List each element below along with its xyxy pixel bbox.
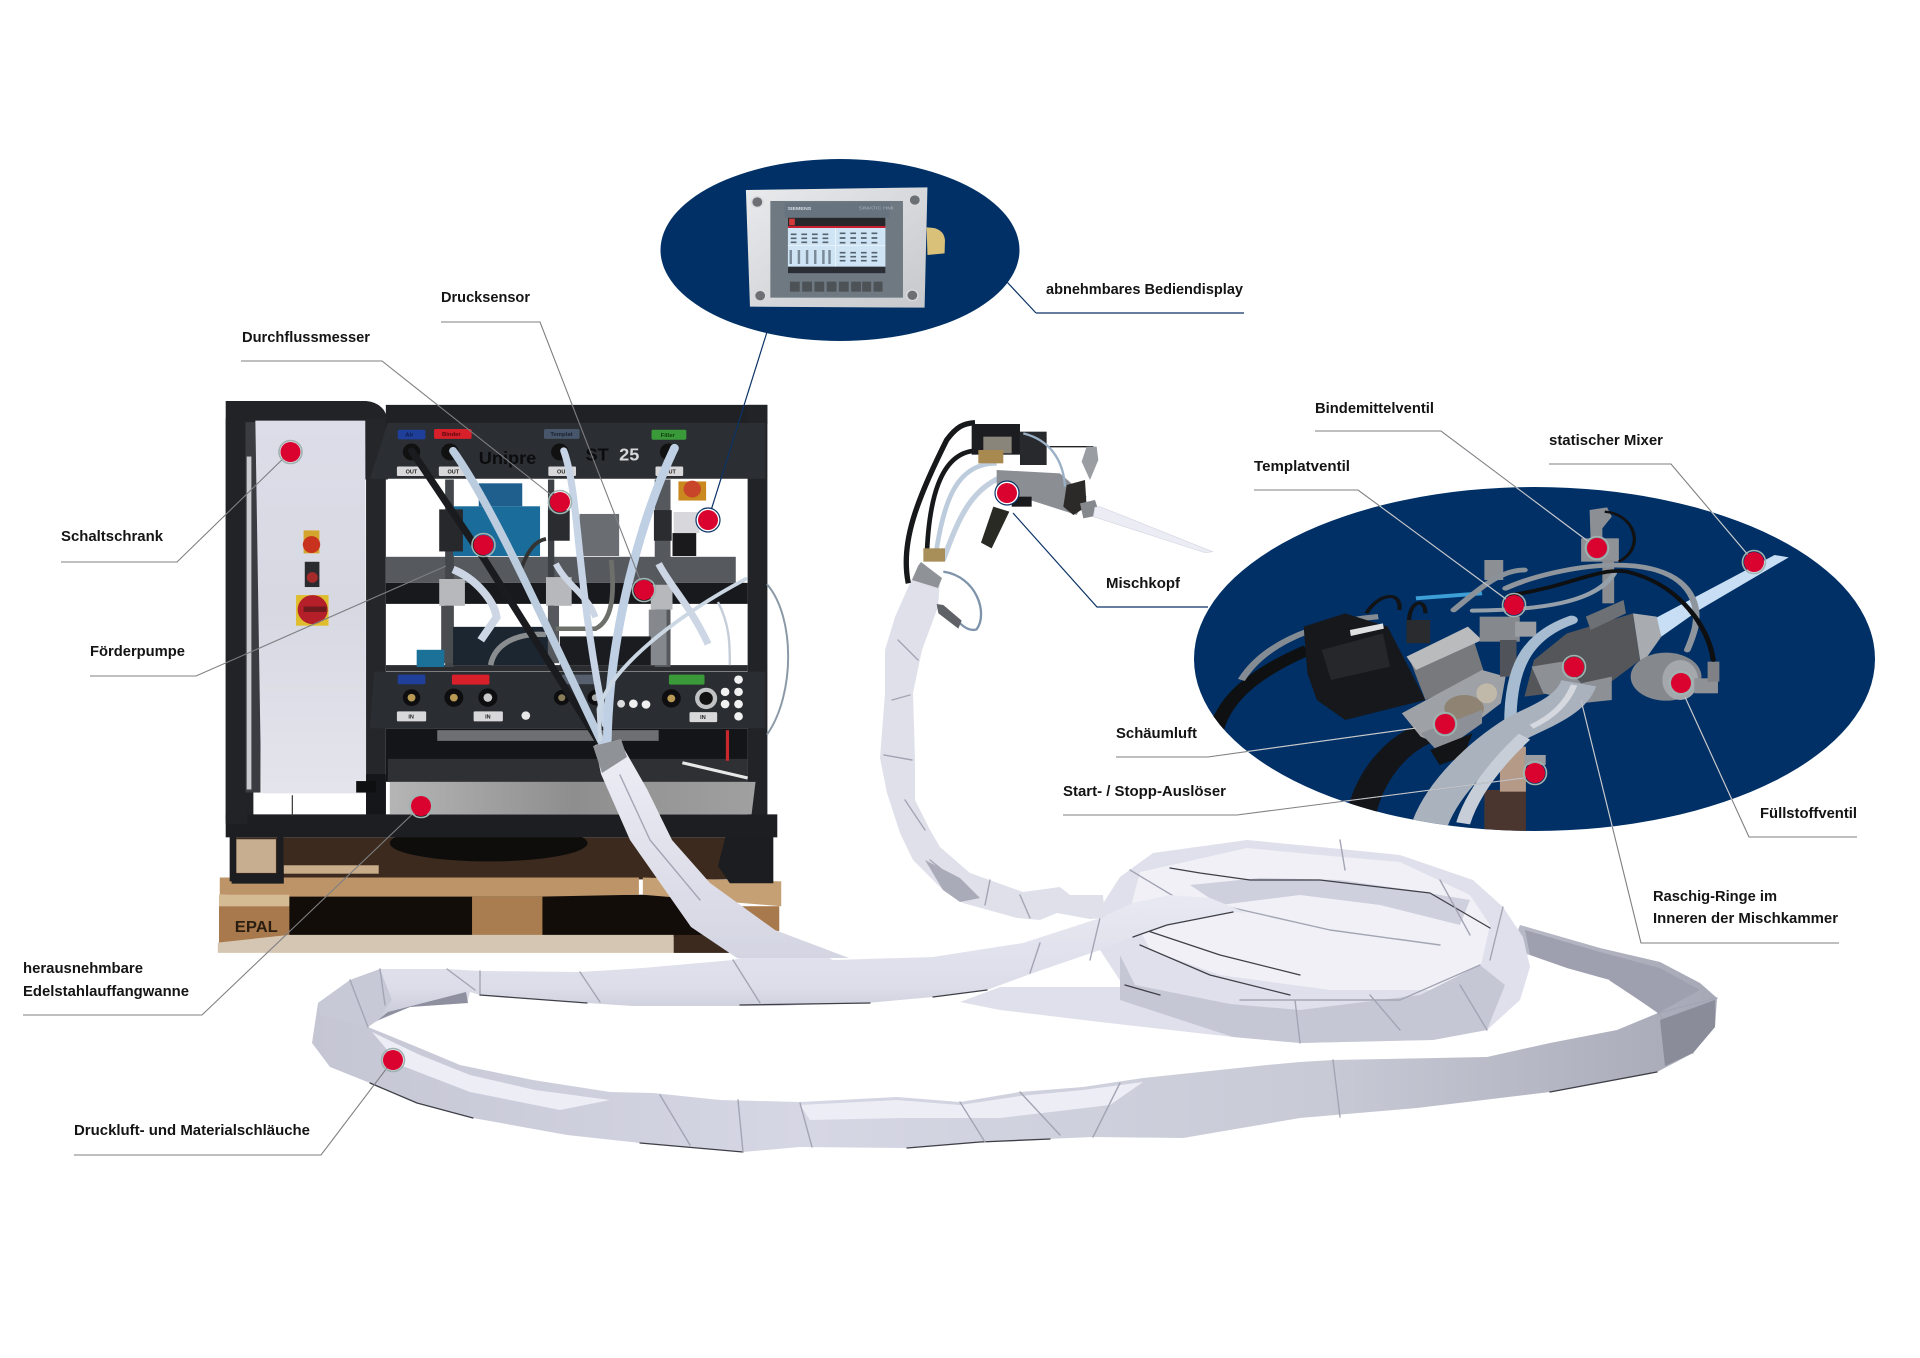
leader lines xyxy=(23,282,1857,1155)
label: Förderpumpe: Förderpumpe xyxy=(90,643,185,660)
label: Füllstoffventil: Füllstoffventil xyxy=(1760,805,1857,822)
photo: mixing head xyxy=(906,423,1213,630)
label: Raschig-Ringe im Inneren der Mischkammer: Inneren der Mischkammer xyxy=(1653,910,1838,927)
label: Raschig-Ringe im Inneren der Mischkammer xyxy=(1653,888,1838,927)
label: Drucksensor: Drucksensor xyxy=(441,289,530,306)
upper panel: Air xyxy=(405,433,414,439)
hose lower loop xyxy=(312,925,1717,1152)
pallet: EPAL xyxy=(235,918,278,936)
lower panel: IN xyxy=(408,714,414,720)
label: Raschig-Ringe im Inneren der Mischkammer: Raschig-Ringe im xyxy=(1653,888,1777,905)
photo: conveying unit on pallet xyxy=(218,401,788,953)
HMI screen xyxy=(788,218,885,273)
HMI bezel xyxy=(770,201,903,298)
upper panel: OUT xyxy=(664,469,677,475)
label: Durchflussmesser: Durchflussmesser xyxy=(242,329,370,346)
label: abnehmbares Bediendisplay: abnehmbares Bediendisplay xyxy=(1046,281,1244,298)
detail oval: operating display xyxy=(660,159,1020,341)
static mixer nozzle xyxy=(1093,507,1213,553)
mixing chamber xyxy=(1524,600,1719,703)
brass connector xyxy=(927,227,945,255)
label: herausnehmbare Edelstahlauffangwanne: Edelstahlauffangwanne xyxy=(23,983,189,1000)
stainless drip tray xyxy=(388,730,756,814)
mixer tube xyxy=(1652,555,1789,637)
hose upper band xyxy=(318,895,1247,1027)
upper panel: Filler xyxy=(661,433,676,439)
detail oval: operating display: SIEMENS xyxy=(787,206,812,212)
pallet xyxy=(218,837,781,953)
upper panel xyxy=(370,423,765,479)
upper panel: OUT xyxy=(557,469,569,475)
label: Mischkopf: Mischkopf xyxy=(1106,575,1181,592)
label: Bindemittelventil: Bindemittelventil xyxy=(1315,400,1434,417)
hose to mixing head xyxy=(880,562,1105,920)
screws xyxy=(752,195,921,301)
label: herausnehmbare Edelstahlauffangwanne xyxy=(23,960,189,1000)
hose coil xyxy=(960,840,1530,1043)
lower panel xyxy=(370,672,765,728)
soft keys xyxy=(790,282,883,292)
upper panel: 25 xyxy=(619,445,639,464)
upper panel: Unipre xyxy=(479,448,536,468)
label: Schäumluft: Schäumluft xyxy=(1116,725,1197,742)
material hoses at machine xyxy=(412,448,788,744)
detail oval: mixing head close-up xyxy=(1194,487,1875,832)
label: Start- / Stopp-Auslöser: Start- / Stopp-Auslöser xyxy=(1063,783,1226,800)
upper panel: Templat xyxy=(550,432,573,438)
motors and valves xyxy=(417,481,730,667)
cable loop xyxy=(943,572,981,630)
electro valve block xyxy=(1304,613,1506,765)
lower panel: IN xyxy=(700,715,706,721)
upper panel: OUT xyxy=(448,469,460,475)
electrical cabinet xyxy=(245,421,386,816)
pressure hoses xyxy=(906,423,1007,583)
upper panel: OUT xyxy=(406,469,418,475)
label: herausnehmbare Edelstahlauffangwanne: herausnehmbare xyxy=(23,960,143,977)
label: Schaltschrank: Schaltschrank xyxy=(61,528,164,545)
braided hose xyxy=(1430,683,1579,823)
marker dots xyxy=(279,440,1766,1072)
pneumatic lines xyxy=(1454,565,1713,723)
hose from machine xyxy=(593,739,849,958)
cables xyxy=(1215,593,1482,813)
photo: long sleeved hose bundle xyxy=(312,562,1717,1152)
upper panel: Binder xyxy=(442,432,461,438)
detail oval: operating display: SIMATIC HMI xyxy=(859,206,894,211)
label: Druckluft- und Materialschläuche: Druckluft- und Materialschläuche xyxy=(74,1122,310,1139)
lower panel: IN xyxy=(485,714,491,720)
head body xyxy=(923,424,1100,629)
machine frame xyxy=(226,401,777,884)
valve stem xyxy=(1480,507,1634,677)
post xyxy=(1484,790,1526,832)
label: Templatventil: Templatventil xyxy=(1254,458,1350,475)
upper panel: ST xyxy=(586,445,609,464)
stainless mounting plate xyxy=(746,187,927,308)
label: statischer Mixer: statischer Mixer xyxy=(1549,432,1663,449)
